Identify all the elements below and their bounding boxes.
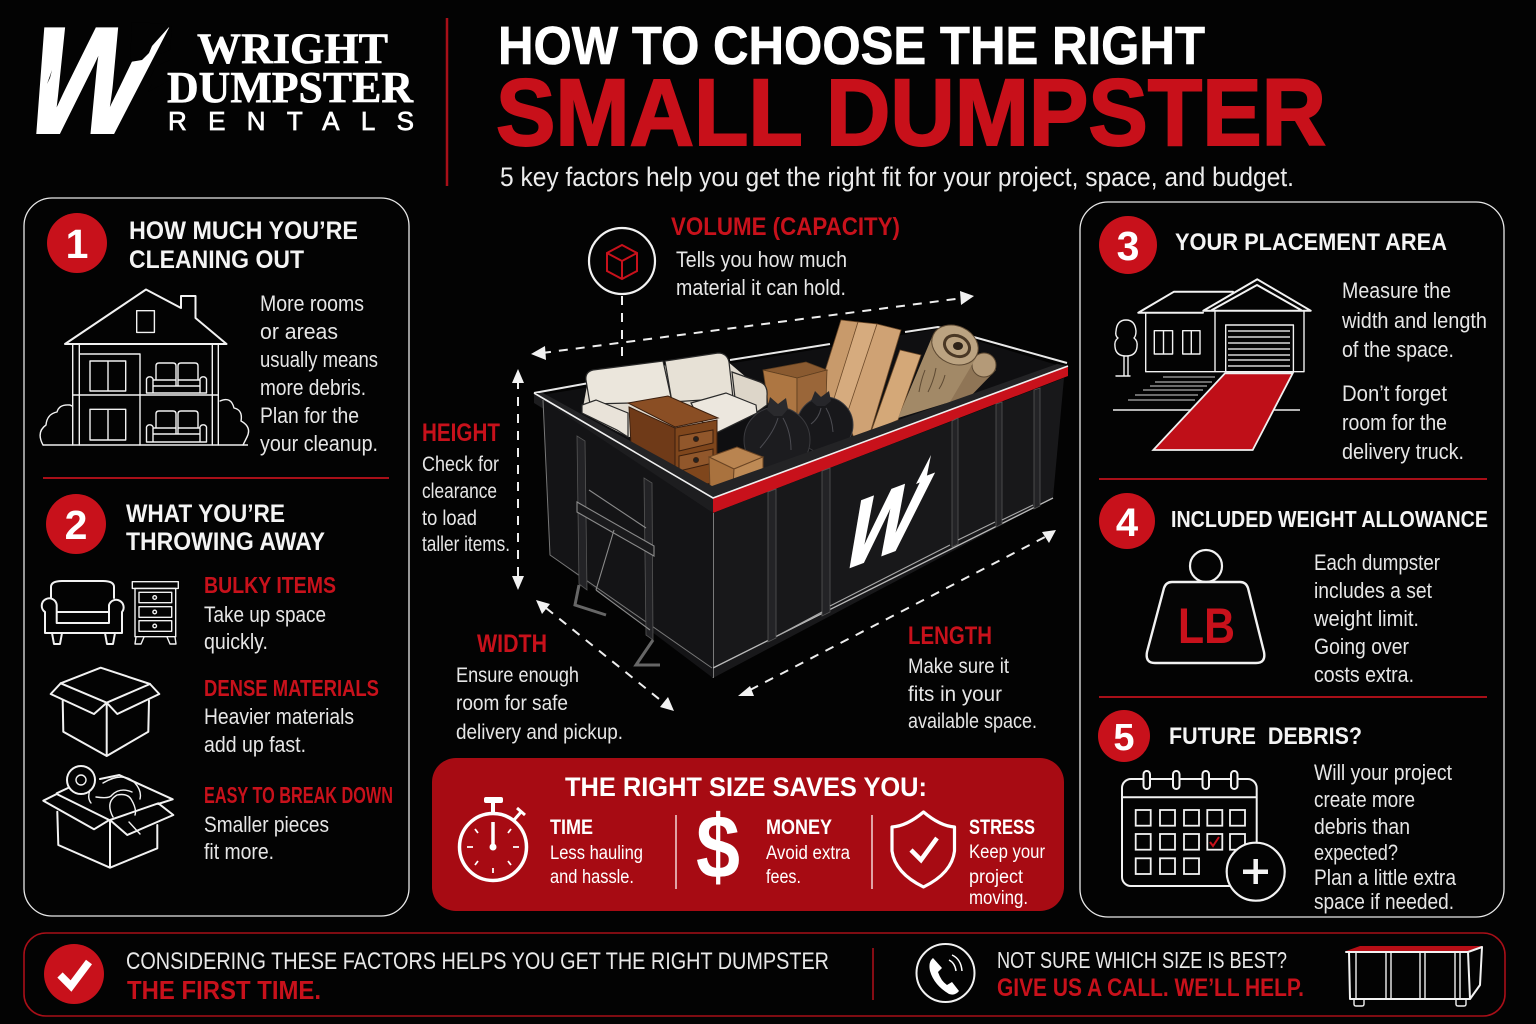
rolled rugs [898, 318, 996, 418]
logo wordmark: WRIGHT [197, 26, 388, 73]
subtitle: 5 key factors help you get the right fit for your project, space, and budget. [500, 162, 1294, 192]
text: more rooms: usually means [260, 347, 378, 372]
heading: how much you're cleaning out: CLEANING OUT [129, 246, 304, 274]
badge 5 [1098, 710, 1150, 762]
text: height: HEIGHT [422, 419, 500, 447]
text: considering these factors [126, 948, 829, 1005]
panel: right factors 3, 4 and 5 [1080, 202, 1504, 917]
text: future debris: debris than [1314, 814, 1410, 839]
arrow: width [536, 600, 674, 711]
heading: included weight allowance: INCLUDED WEIGHT ALLOWANCE [1171, 506, 1488, 532]
icon: volume cube [589, 228, 655, 294]
badge 3: 3 [1117, 223, 1139, 269]
rear wood planks [820, 320, 921, 438]
illustration: dumpster with debris [534, 318, 1068, 678]
heading: your placement area: YOUR PLACEMENT AREA [1175, 229, 1447, 256]
icon: mini dumpster [1346, 946, 1482, 1006]
text: length: LENGTH [908, 622, 992, 650]
text: easy to break down: EASY TO BREAK DOWN [204, 782, 393, 808]
icon: LB weight: LB [1178, 598, 1235, 654]
text: time: and hassle. [550, 867, 634, 888]
text: future debris: space if needed. [1314, 889, 1454, 914]
text: future debris: Will your project [1314, 760, 1452, 785]
garbage bags [744, 391, 853, 473]
text: stress: Keep your [969, 842, 1046, 863]
title [496, 16, 1326, 166]
text: height: to load [422, 507, 477, 530]
text: volume capacity: material it can hold. [676, 275, 846, 300]
arrow: length [738, 530, 1056, 696]
icon: closed box [51, 668, 159, 756]
cardboard box back [763, 362, 827, 415]
text: money: fees. [766, 867, 801, 888]
text: bulky items [204, 572, 336, 654]
badge 5: 5 [1113, 717, 1135, 759]
dumpster rim [534, 364, 1068, 513]
text: width: WIDTH [477, 630, 547, 658]
heading: how much you're cleaning out [129, 217, 358, 274]
arrow: volume leader [621, 296, 623, 360]
text: weight limit: costs extra. [1314, 662, 1414, 687]
text: not sure which size: NOT SURE WHICH SIZE IS BEST? [997, 947, 1287, 973]
text: length [908, 622, 1037, 733]
icon: nightstand [132, 582, 178, 644]
icon: stopwatch [460, 797, 526, 880]
text: width: delivery and pickup. [456, 721, 623, 744]
text: easy to break down: fit more. [204, 839, 274, 864]
text: height: Check for [422, 453, 499, 476]
title: HOW TO CHOOSE THE RIGHT [498, 16, 1205, 76]
logo brush W mark: W [4, 0, 178, 165]
heading: THE RIGHT SIZE SAVES YOU: [565, 772, 927, 802]
text: money [766, 816, 850, 888]
icon: open box with debris [43, 766, 173, 868]
logo W on dumpster [829, 451, 942, 594]
badge 4: 4 [1116, 501, 1139, 545]
text: weight limit: includes a set [1314, 578, 1432, 603]
text: more rooms: More rooms [260, 291, 364, 316]
text: more rooms: more debris. [260, 375, 366, 400]
text: more rooms: or areas [260, 319, 338, 344]
text: volume capacity [671, 213, 900, 300]
text: volume capacity: VOLUME (CAPACITY) [671, 213, 900, 241]
icon: armchair [42, 581, 124, 644]
heading: how much you're cleaning out: HOW MUCH YOU’RE [129, 217, 358, 245]
text: time [550, 816, 643, 888]
logo wordmark: DUMPSTER [167, 63, 414, 112]
panel: centre dumpster diagram [422, 213, 1068, 744]
text: measure the space: of the space. [1342, 337, 1454, 362]
text: length: fits in your [908, 683, 1002, 706]
text: more rooms [260, 291, 378, 456]
dumpster front long face [713, 378, 1064, 678]
panel: the right size saves you [432, 758, 1064, 911]
text: dense materials [204, 675, 379, 757]
title: SMALL DUMPSTER [496, 60, 1326, 166]
icon: LB weight [1147, 550, 1264, 663]
icon: phone [916, 944, 974, 1002]
text: future debris [1314, 760, 1457, 914]
text: easy to break down [204, 782, 393, 864]
heading: what you're throwing away [126, 500, 325, 556]
text: more rooms: Plan for the [260, 403, 359, 428]
text: bulky items: quickly. [204, 629, 268, 654]
text: not sure which size: GIVE US A CALL. WE’LL HELP. [997, 974, 1304, 1002]
text: stress [969, 816, 1046, 909]
text: stress: project [969, 867, 1024, 888]
badge 1: 1 [66, 221, 88, 267]
text: bulky items: BULKY ITEMS [204, 572, 336, 598]
panel: bottom banner [24, 933, 1505, 1016]
heading: future debris: FUTURE DEBRIS? [1169, 723, 1362, 750]
icon: two storey house [40, 290, 249, 445]
text: time: TIME [550, 816, 593, 839]
text: measure the space: room for the [1342, 410, 1447, 435]
text: length: available space. [908, 710, 1037, 733]
text: dense materials: Heavier materials [204, 704, 354, 729]
heading: what you're throwing away: WHAT YOU’RE [126, 500, 285, 528]
dumpster interior [542, 329, 1057, 490]
logo wordmark: RENTALS [168, 106, 414, 136]
icon: dollar sign: $ [696, 798, 740, 898]
text: weight limit: Going over [1314, 634, 1409, 659]
text: height: taller items. [422, 533, 510, 556]
badge 1 [47, 213, 107, 273]
text: width [456, 630, 623, 744]
white sofa [582, 353, 767, 437]
icon: red check [44, 944, 104, 1004]
text: weight limit [1313, 550, 1440, 687]
text: money: Avoid extra [766, 843, 850, 864]
text: measure the space: Don’t forget [1342, 381, 1447, 406]
text: volume capacity: Tells you how much [676, 247, 847, 272]
badge 2: 2 [65, 502, 87, 548]
text: stress: moving. [969, 888, 1028, 909]
text: height [422, 419, 510, 556]
text: measure the space: delivery truck. [1342, 439, 1464, 464]
text: stress: STRESS [969, 816, 1035, 839]
text: dense materials: DENSE MATERIALS [204, 675, 379, 701]
text: not sure which size [997, 947, 1304, 1002]
text: considering these factors: CONSIDERING THESE FACTORS HELPS YOU GET THE RIGHT DUMPSTER [126, 948, 829, 975]
heading: what you're throwing away: THROWING AWAY [126, 528, 325, 556]
text: money: MONEY [766, 816, 832, 839]
text: weight limit: Each dumpster [1314, 550, 1440, 575]
text: measure the space: width and length [1341, 308, 1487, 333]
arrow: height [512, 369, 524, 590]
text: bulky items: Take up space [204, 602, 326, 627]
text: future debris: create more [1314, 787, 1415, 812]
badge 3 [1099, 216, 1157, 274]
arrow: top dimension [531, 291, 974, 360]
logo W on dumpster: W [829, 451, 942, 594]
panel: left factors 1 and 2 [24, 198, 409, 916]
text: more rooms: your cleanup. [260, 431, 378, 456]
text: measure the space [1341, 278, 1487, 464]
text: easy to break down: Smaller pieces [204, 812, 329, 837]
text: measure the space: Measure the [1342, 278, 1451, 303]
text: height: clearance [422, 480, 497, 503]
icon: calendar with plus [1122, 771, 1285, 901]
dumpster end face [543, 400, 713, 678]
text: future debris: Plan a little extra [1314, 865, 1457, 890]
logo: Wright Dumpster Rentals [4, 0, 414, 165]
text: considering these factors: THE FIRST TIME. [127, 975, 321, 1005]
text: time: Less hauling [550, 843, 643, 864]
text: length: Make sure it [908, 655, 1009, 678]
text: future debris: expected? [1314, 840, 1398, 865]
wooden cabinet [628, 396, 718, 490]
logo wordmark [167, 26, 414, 136]
icon: shield with check [892, 812, 954, 887]
text: dense materials: add up fast. [204, 732, 306, 757]
text: width: room for safe [456, 692, 568, 715]
small cardboard box [709, 447, 763, 490]
icon: house and driveway [1113, 279, 1311, 450]
text: width: Ensure enough [456, 664, 579, 687]
badge 2 [46, 494, 106, 554]
text: weight limit: weight limit. [1313, 606, 1419, 631]
badge 4 [1099, 493, 1155, 549]
